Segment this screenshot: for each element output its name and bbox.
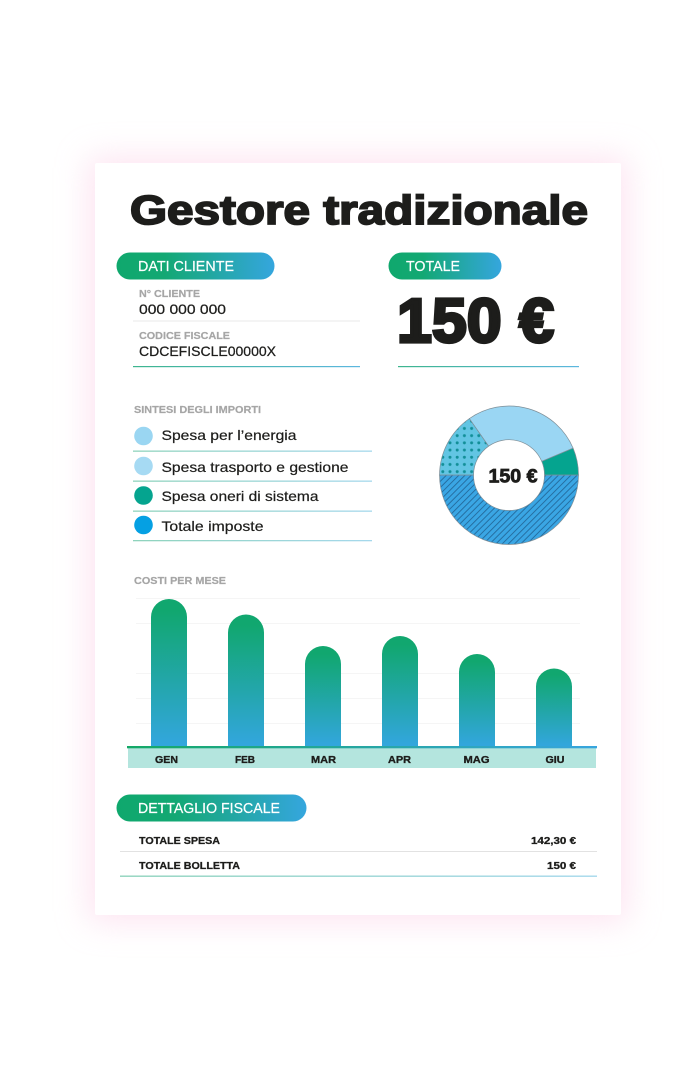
month labels: MAR bbox=[311, 754, 336, 766]
heading: costi per mese: COSTI PER MESE bbox=[134, 576, 226, 587]
panel: costi per mese bbox=[127, 576, 597, 768]
pill heading: dettaglio fiscale bbox=[116, 794, 306, 822]
segment: trasporto bbox=[440, 419, 489, 475]
row: totale bolletta bbox=[139, 860, 576, 872]
bar: apr bbox=[382, 636, 418, 747]
pill heading: dettaglio fiscale: DETTAGLIO FISCALE bbox=[138, 801, 280, 817]
row: totale spesa: TOTALE SPESA bbox=[139, 835, 220, 847]
legend item: energia bbox=[134, 427, 297, 445]
pill heading: dati cliente bbox=[116, 252, 274, 280]
bar: mar bbox=[305, 646, 341, 747]
card: pink glow shadow bbox=[88, 157, 628, 922]
legend item: imposte bbox=[134, 516, 264, 534]
panel: dettaglio fiscale bbox=[116, 794, 597, 877]
month band bbox=[128, 748, 596, 768]
month labels: GEN bbox=[155, 754, 178, 766]
total amount: 150 € bbox=[397, 287, 554, 356]
month labels: FEB bbox=[235, 754, 255, 766]
donut chart bbox=[440, 406, 578, 544]
bar: mag bbox=[459, 654, 495, 747]
legend item: oneri: Spesa oneri di sistema bbox=[162, 488, 319, 504]
legend item: trasporto: Spesa trasporto e gestione bbox=[162, 459, 349, 475]
donut centre label: 150 € bbox=[488, 466, 538, 488]
value: numero cliente: 000 000 000 bbox=[139, 301, 226, 317]
row: totale spesa: 142,30 € bbox=[531, 835, 576, 847]
value: codice fiscale: CDCEFISCLE00000X bbox=[139, 343, 277, 359]
segment: oneri bbox=[542, 448, 578, 475]
legend item: imposte: Totale imposte bbox=[162, 518, 264, 534]
bar: feb bbox=[228, 614, 264, 747]
label: codice fiscale: CODICE FISCALE bbox=[139, 331, 230, 342]
bar: gen bbox=[151, 599, 187, 747]
pill heading: totale bbox=[388, 252, 502, 280]
title: Gestore tradizionale bbox=[130, 187, 588, 233]
bar: giu bbox=[536, 668, 572, 747]
row: totale spesa bbox=[139, 835, 576, 847]
segment: energia bbox=[469, 406, 573, 461]
segment: imposte bbox=[440, 475, 578, 544]
pill heading: totale: TOTALE bbox=[406, 259, 460, 275]
panel: totale bbox=[388, 252, 579, 367]
bar chart bbox=[151, 599, 572, 747]
card: white panel bbox=[95, 163, 621, 915]
heading: sintesi: SINTESI DEGLI IMPORTI bbox=[134, 405, 261, 416]
label: numero cliente: N° CLIENTE bbox=[139, 289, 200, 300]
month labels: GIU bbox=[546, 754, 564, 766]
panel: dati cliente bbox=[116, 252, 360, 367]
legend item: oneri bbox=[134, 486, 319, 505]
month labels: MAG bbox=[464, 754, 490, 766]
pill heading: dati cliente: DATI CLIENTE bbox=[138, 259, 234, 275]
panel: sintesi degli importi bbox=[133, 405, 372, 541]
month labels: APR bbox=[388, 754, 411, 766]
row: totale bolletta: 150 € bbox=[547, 860, 576, 872]
legend item: trasporto bbox=[134, 457, 349, 475]
legend item: energia: Spesa per l’energia bbox=[162, 427, 297, 443]
row: totale bolletta: TOTALE BOLLETTA bbox=[139, 860, 240, 872]
axis line bbox=[127, 746, 597, 748]
month labels bbox=[155, 754, 564, 766]
